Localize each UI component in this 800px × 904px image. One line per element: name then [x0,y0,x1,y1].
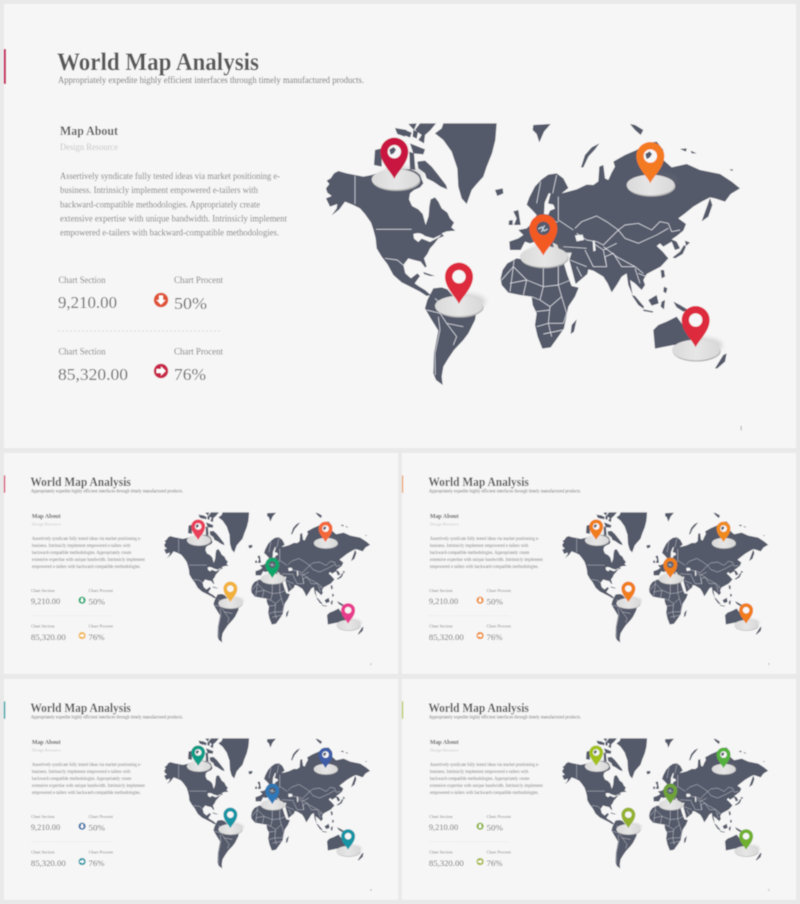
section subheading: Design Resource [32,522,61,527]
text block: description: business. Intrinsicly implement empowered e-tailers with [32,544,131,549]
pin: Australia [336,603,362,631]
stat row 2 [31,849,114,868]
stat row 1 [31,588,114,607]
pin: Russia [712,748,737,775]
subtitle: Appropriately expedite highly efficient interfaces through timely manufactured products. [429,715,581,720]
stat row 2: Chart Procent [487,623,512,628]
stat row 2: 85,320.00 [429,858,464,868]
stat row 2: 76% [174,365,206,384]
pin: North America [585,519,610,546]
text block: description: business. Intrinsicly implement empowered e-tailers with [60,185,258,196]
stat row 2: 85,320.00 [429,632,464,642]
stat row 2: Chart Procent [174,346,223,356]
pin: Europe [261,558,286,584]
section subheading: Design Resource [60,142,118,152]
section heading: Map About [32,513,62,520]
pin: Australia [336,829,362,857]
stat row 1 [31,814,114,833]
title: World Map Analysis [30,475,131,489]
panel: slide 4 [4,679,398,900]
pin: South America [435,263,486,318]
section heading: Map About [32,739,62,746]
stat row 1: 9,210.00 [429,822,458,832]
stat row 2: 85,320.00 [31,632,66,642]
stat row 1: 9,210.00 [31,596,60,606]
icon: arrow [79,823,86,830]
page number: 3 [768,662,770,666]
icon: arrow [477,632,484,639]
pin: South America [218,582,244,609]
text block: description [430,537,543,570]
pin: Russia [627,142,677,197]
stat row 2 [31,623,114,642]
text block: description: business. Intrinsicly implement empowered e-tailers with [32,770,131,775]
section heading: Map About [60,124,119,138]
title: World Map Analysis [428,701,529,715]
accent bar [4,701,5,719]
page number: 4 [370,888,372,892]
text block: description: backward-compatible methodologies. Appropriately create [32,777,131,782]
stat row 2 [429,849,512,868]
stat row 1 [429,814,512,833]
stat row 1: Chart Procent [89,814,114,819]
icon: down arrow [154,293,168,307]
section subheading: Design Resource [430,748,459,753]
stat row 1: Chart Section [429,814,453,819]
text block: description: extensive expertise with unique bandwidth. Intrinsicly implement [60,214,287,224]
text block: description: empowered e-tailers with backward-compatible methodologies. [430,791,539,796]
accent bar [402,475,403,493]
icon: arrow [477,823,484,830]
section subheading: Design Resource [32,748,61,753]
world map with pins [164,512,370,643]
world map with pins [326,123,740,385]
panel: slide 3 [402,453,796,674]
text block: description: Assertively syndicate fully tested ideas via market positioning e- [430,537,540,542]
text block: description: extensive expertise with unique bandwidth. Intrinsicly implement [32,784,145,789]
text block: description [32,763,145,796]
text block: description: backward-compatible methodologies. Appropriately create [60,200,260,210]
pin: South America [616,808,642,835]
icon: right arrow [154,364,168,378]
text block: description [430,763,543,796]
stat row 2: Chart Procent [89,849,114,854]
section heading: Map About [430,513,460,520]
title: World Map Analysis [428,475,529,489]
text block: description: Assertively syndicate fully tested ideas via market positioning e- [32,763,142,768]
text block: description [60,171,287,238]
text block: description: empowered e-tailers with backward-compatible methodologies. [430,565,539,570]
text block: description: empowered e-tailers with backward-compatible methodologies. [60,228,279,238]
accent bar [4,49,6,84]
stat row 1: 9,210.00 [429,596,458,606]
text block: description: extensive expertise with unique bandwidth. Intrinsicly implement [32,558,145,563]
pin: North America [187,519,212,546]
text block: description: Assertively syndicate fully tested ideas via market positioning e- [60,171,280,182]
page number: 5 [768,888,770,892]
stat row 1: Chart Procent [89,588,114,593]
page number: 2 [370,662,372,666]
stat row 2: 85,320.00 [58,365,128,384]
icon: arrow [477,858,484,865]
stat row 1: 9,210.00 [58,293,117,312]
stat row 1: Chart Section [31,814,55,819]
pin: North America [187,745,212,772]
section subheading: Design Resource [430,522,459,527]
stat row 2: 76% [487,858,502,868]
pin: Australia [734,829,760,857]
pin: North America [372,138,422,191]
pin: Europe [659,784,684,810]
icon: arrow [477,597,484,604]
accent bar [4,475,5,493]
stat row 2 [58,346,223,384]
stat row 1: 50% [89,823,105,833]
world map with pins [562,512,768,643]
text block: description [32,537,145,570]
stat row 2: 76% [89,632,104,642]
title: World Map Analysis [57,49,259,76]
stat row 1: 50% [487,597,503,607]
text block: description: Assertively syndicate fully tested ideas via market positioning e- [32,537,142,542]
text block: description: Assertively syndicate fully tested ideas via market positioning e- [430,763,540,768]
stat row 1: 50% [89,597,105,607]
subtitle: Appropriately expedite highly efficient interfaces through timely manufactured products. [31,489,183,494]
text block: description: business. Intrinsicly implement empowered e-tailers with [430,544,529,549]
stat row 2: 85,320.00 [31,858,66,868]
stat row 2: 76% [487,632,502,642]
stat row 2: Chart Procent [487,849,512,854]
pin: South America [218,808,244,835]
panel: slide 2 [4,453,398,674]
text block: description: backward-compatible methodologies. Appropriately create [32,551,131,556]
world map with pins [562,738,768,869]
subtitle: Appropriately expedite highly efficient interfaces through timely manufactured products. [429,489,581,494]
stat row 2: Chart Section [429,849,453,854]
text block: description: extensive expertise with unique bandwidth. Intrinsicly implement [430,784,543,789]
pin: Australia [672,306,723,362]
stat row 1: 50% [174,294,207,313]
text block: description: empowered e-tailers with backward-compatible methodologies. [32,565,141,570]
stat row 2: Chart Section [31,623,55,628]
pin: Europe [659,558,684,584]
stat row 1: Chart Procent [487,814,512,819]
stat row 1 [429,588,512,607]
text block: description: backward-compatible methodologies. Appropriately create [430,551,529,556]
title: World Map Analysis [30,701,131,715]
pin: Russia [314,522,339,549]
text block: description: empowered e-tailers with backward-compatible methodologies. [32,791,141,796]
stat row 1: Chart Section [429,588,453,593]
pin: Europe [520,214,571,268]
pin: South America [616,582,642,609]
stat row 2: 76% [89,858,104,868]
stat row 1: 50% [487,823,503,833]
pin: North America [585,745,610,772]
world map with pins [164,738,370,869]
stat row 2: Chart Section [31,849,55,854]
page number: 1 [740,425,743,432]
section heading: Map About [430,739,460,746]
stat row 1: Chart Section [58,275,106,285]
subtitle: Appropriately expedite highly efficient interfaces through timely manufactured products. [31,715,183,720]
stat row 2 [429,623,512,642]
text block: description: business. Intrinsicly implement empowered e-tailers with [430,770,529,775]
subtitle: Appropriately expedite highly efficient interfaces through timely manufactured products. [58,75,364,86]
stat row 1: 9,210.00 [31,822,60,832]
stat row 2: Chart Section [58,346,106,356]
accent bar [402,701,403,719]
icon: arrow [79,597,86,604]
pin: Australia [734,603,760,631]
stat row 1: Chart Procent [487,588,512,593]
icon: arrow [79,858,86,865]
pin: Europe [261,784,286,810]
stat row 1 [58,275,223,313]
panel: main slide [4,4,796,448]
text block: description: backward-compatible methodologies. Appropriately create [430,777,529,782]
stat row 2: Chart Procent [89,623,114,628]
pin: Russia [712,522,737,549]
pin: Russia [314,748,339,775]
stat row 1: Chart Section [31,588,55,593]
icon: arrow [79,632,86,639]
text block: description: extensive expertise with unique bandwidth. Intrinsicly implement [430,558,543,563]
stat row 1: Chart Procent [174,275,223,285]
panel: slide 5 [402,679,796,900]
stat row 2: Chart Section [429,623,453,628]
